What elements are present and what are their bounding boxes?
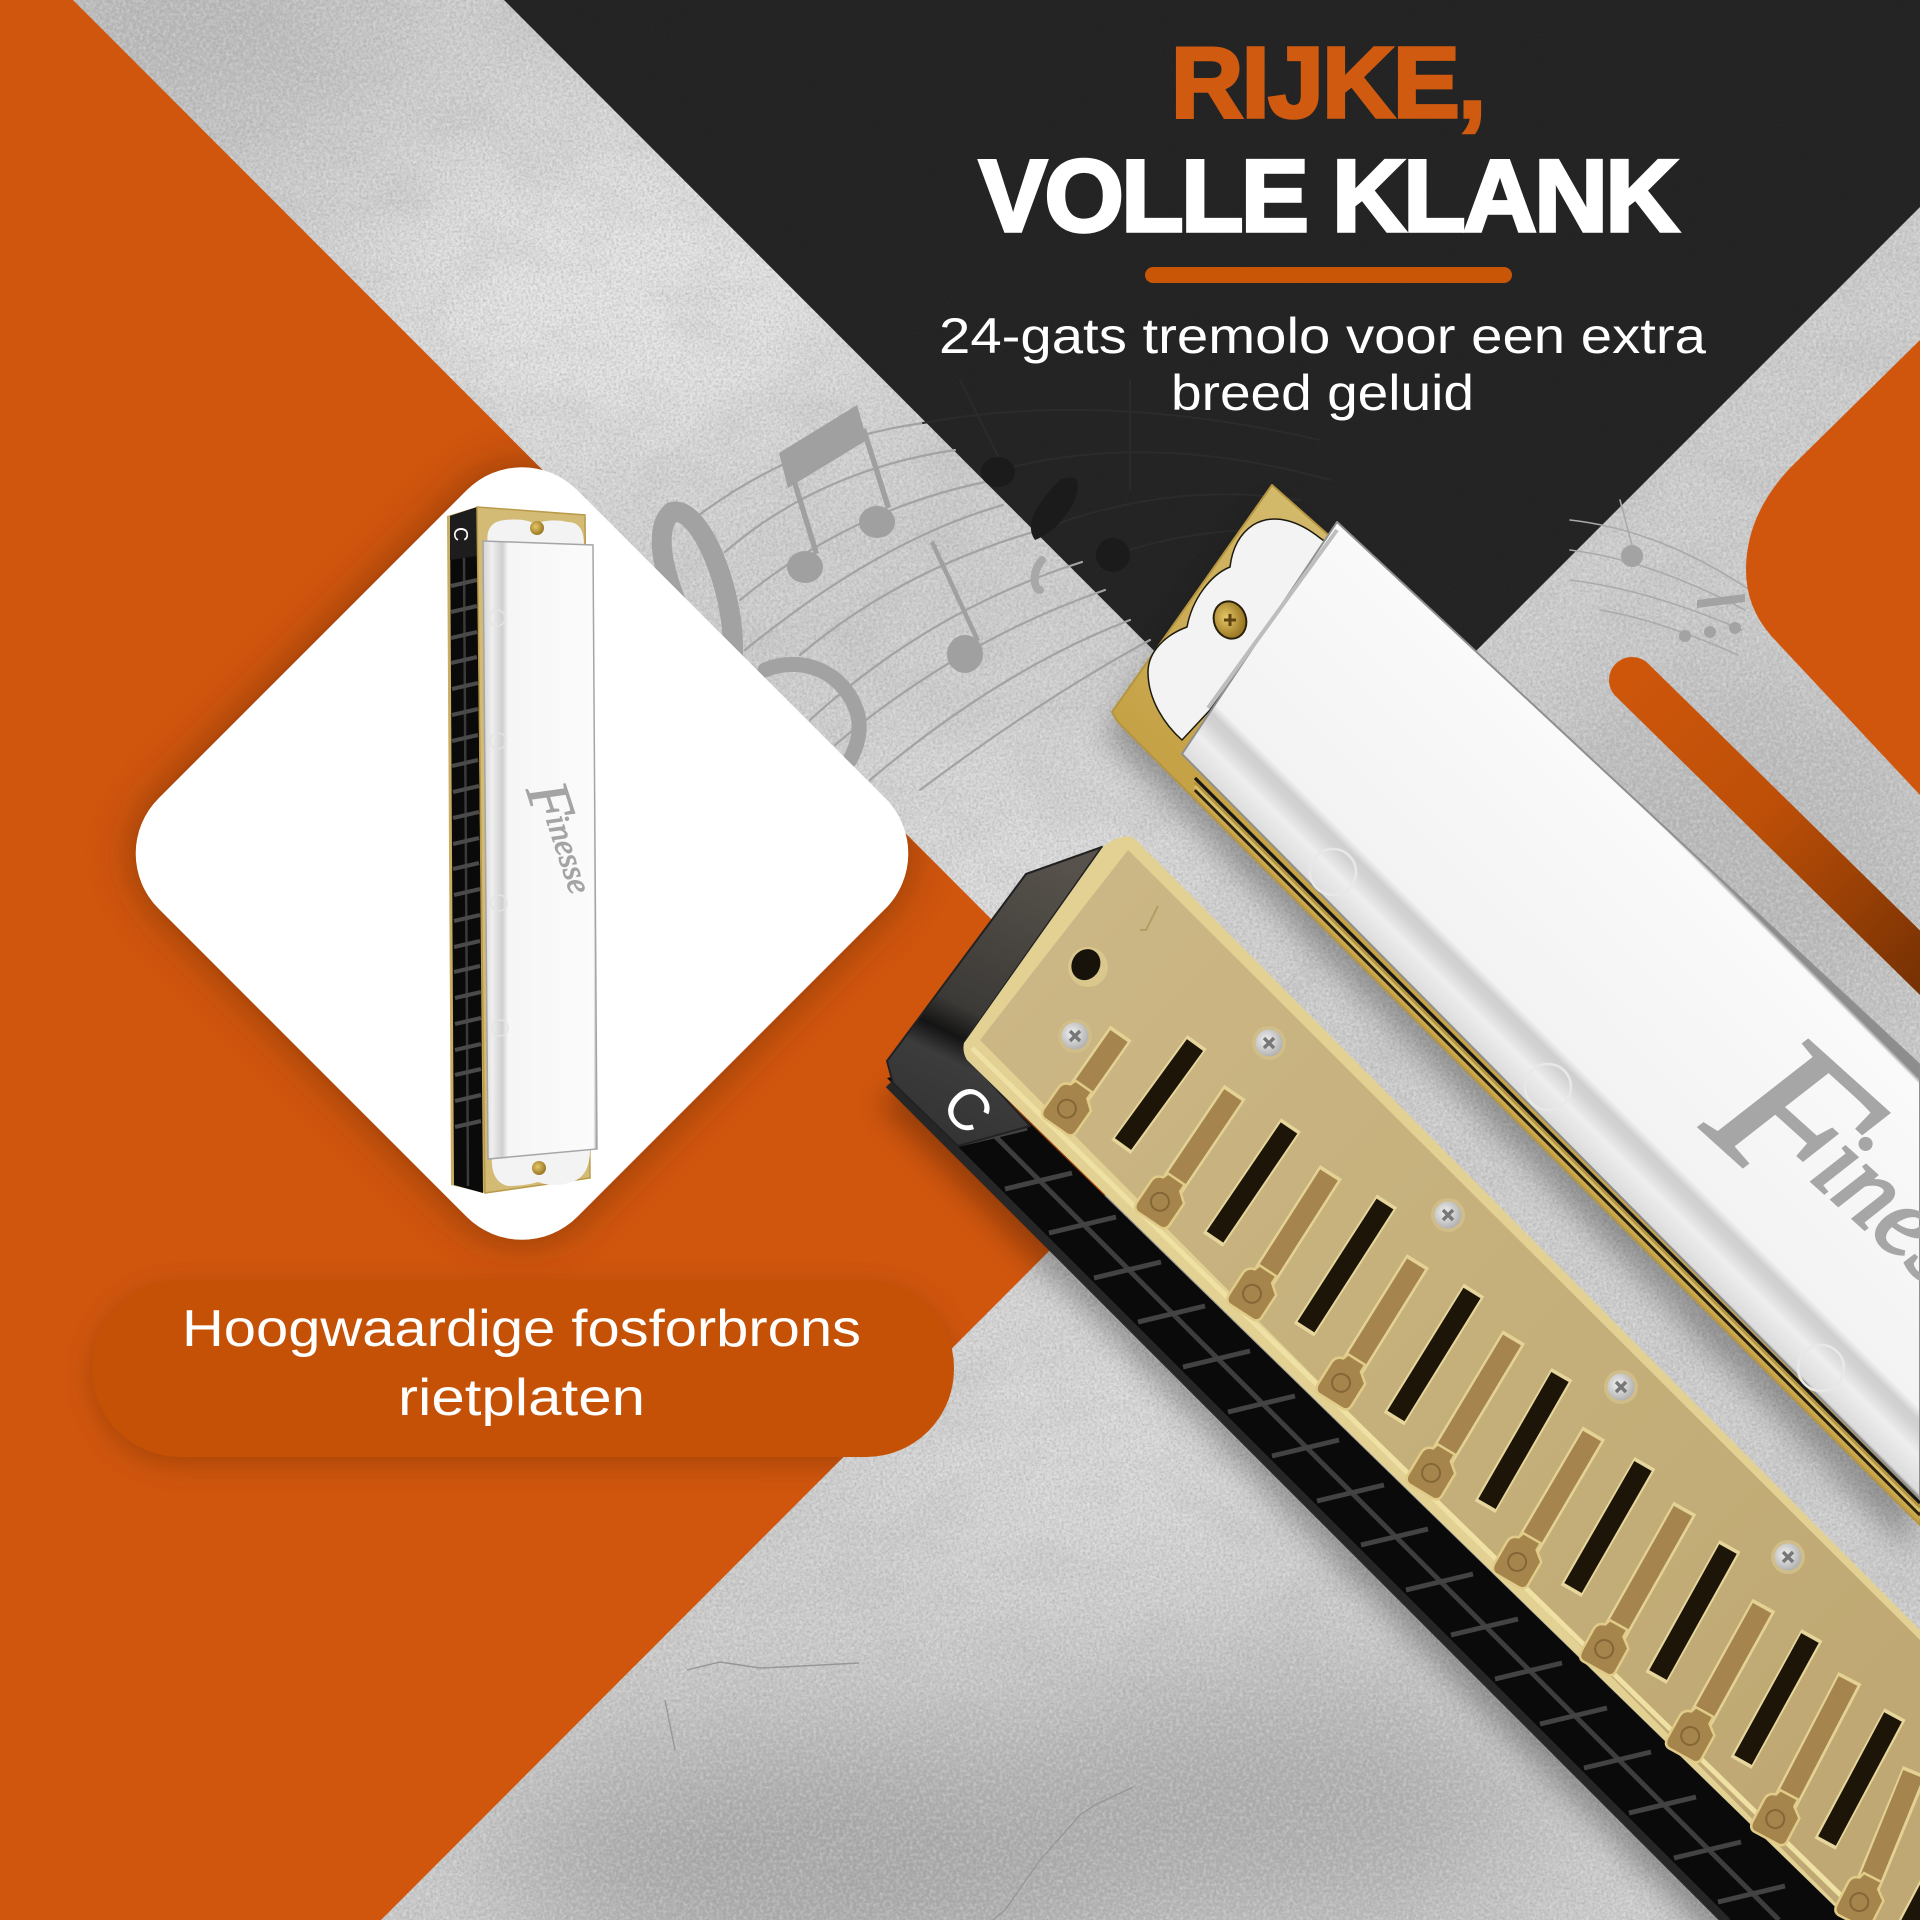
small cover bumps [489, 610, 508, 1036]
small key letter: C [449, 527, 471, 541]
logo: F [1668, 988, 1920, 1250]
small comb [447, 507, 485, 1193]
large gold harmonica [879, 836, 1920, 1920]
cover bumps [1310, 849, 1844, 1391]
black comb [887, 1062, 1900, 1920]
small end caps [487, 520, 584, 545]
gold plate [963, 836, 1920, 1920]
label pill [92, 1280, 954, 1465]
key letter: C [930, 1071, 1005, 1147]
brass screw [1207, 595, 1253, 645]
panel: dark triangle [504, 0, 1920, 812]
subtitle: breed geluid [1171, 365, 1474, 421]
small logo: inesse [538, 810, 597, 898]
white rounded diamond [103, 435, 941, 1272]
small gold plate [477, 507, 590, 1193]
title [979, 27, 1679, 253]
subtitle [939, 308, 1706, 421]
large white harmonica [1104, 485, 1920, 1554]
metal cover [1182, 522, 1920, 1499]
small metal cover [483, 541, 597, 1159]
panel: orange rounded shape right [1746, 340, 1920, 795]
label text: rietplaten [398, 1369, 645, 1427]
small harmonica [447, 507, 612, 1193]
title rule [1145, 267, 1512, 283]
label text [182, 1300, 861, 1427]
small logo: F [513, 773, 588, 830]
small brass screws [530, 521, 546, 1175]
title: VOLLE KLANK [979, 139, 1679, 253]
subtitle: 24-gats tremolo voor een extra [939, 308, 1706, 364]
reeds [1070, 1033, 1915, 1899]
plate screws [1058, 1019, 1805, 1574]
slots [1121, 1042, 1920, 1920]
air hole [1066, 944, 1108, 987]
end face [887, 847, 1102, 1146]
panel: orange diagonal [0, 0, 1186, 1920]
accent bar right [1632, 680, 1920, 1002]
music notes and staff [662, 380, 1750, 790]
scalloped end cap [1148, 519, 1330, 740]
cracks [665, 1662, 1133, 1920]
title: RIJKE, [1171, 27, 1486, 139]
label text: Hoogwaardige fosforbrons [182, 1300, 861, 1358]
